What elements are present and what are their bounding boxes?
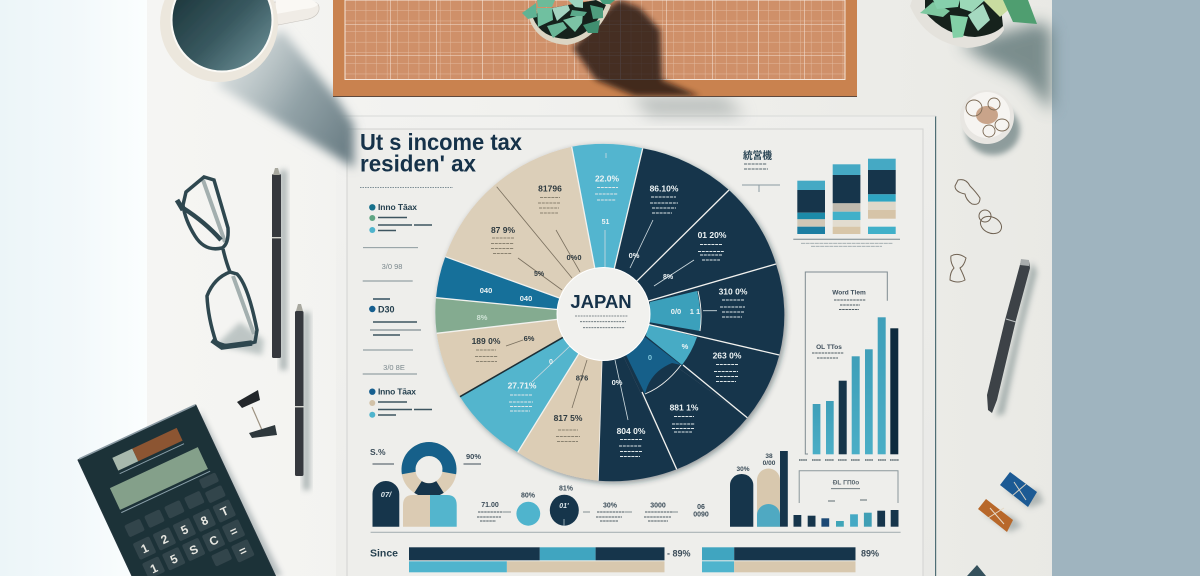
icon: coffee mug [160, 0, 319, 82]
wedge separators [436, 147, 779, 481]
legend note one [363, 248, 418, 281]
calculator: = [237, 543, 249, 559]
title: residen' ax [360, 150, 476, 176]
bottom text and circle stats: 80% [521, 492, 536, 500]
calculator: 1 [148, 561, 160, 576]
white wedge labels: 804 0% [617, 426, 646, 436]
pie wedges [435, 144, 784, 481]
white wedge labels: 310 0% [719, 286, 748, 296]
calculator: T [218, 503, 231, 519]
title [360, 129, 522, 176]
dark wedge text lines [475, 198, 580, 442]
top right caption [742, 149, 780, 192]
calculator [78, 405, 282, 576]
calculator: 5 [168, 551, 180, 567]
plant shadow on poster [630, 96, 745, 116]
column chart: Word Tlem [832, 290, 866, 296]
icon: pen left two [295, 304, 310, 490]
legend two [369, 299, 421, 335]
white wedge labels: 0/0 [671, 307, 681, 316]
bottom text and circle stats: 30% [603, 502, 618, 510]
white wedge labels: 0 [549, 359, 553, 366]
bottom right bars: 38 [765, 453, 773, 460]
icon: pen left one [272, 168, 287, 370]
white wedge labels: 1 1 [690, 307, 700, 316]
small donut and person chart: S.% [370, 447, 386, 457]
legend note one: 3/0 98 [382, 262, 402, 271]
calculator: 5 [179, 522, 191, 538]
small donut and person chart: 90% [466, 452, 481, 461]
white wedge labels: % [682, 342, 689, 351]
cup shadow [215, 30, 354, 168]
legend one: Inno Tāax [378, 202, 417, 212]
icon: paperclips [950, 180, 1004, 282]
white wedge labels: 0 [648, 353, 652, 362]
dark wedge labels [472, 184, 588, 423]
bottom text and circle stats: 0090 [693, 512, 709, 518]
calculator: C [207, 532, 221, 549]
title divider [360, 186, 453, 188]
white wedge labels: 040 [480, 286, 492, 295]
bottom right bars: 30% [736, 466, 750, 473]
white wedge labels: 040 [520, 294, 532, 303]
calculator: = [228, 524, 240, 539]
dark wedge labels: 189 0% [472, 336, 501, 346]
title: Ut s income tax [360, 129, 522, 155]
icon: plant top right [910, 0, 1037, 48]
icon: glasses [177, 177, 264, 355]
cutting board grid mat [333, 0, 857, 96]
stacked bar chart [793, 159, 900, 246]
column chart: OL TTos [816, 344, 842, 351]
small donut and person chart: 07/ [381, 490, 392, 499]
legend three: Inno Tāax [378, 386, 416, 396]
bottom text and circle stats: 71.00 [481, 502, 499, 509]
white wedge labels: 8% [477, 313, 488, 322]
icon: succulent in pot [522, 0, 615, 45]
inner ring wedges [626, 291, 701, 394]
dark wedge labels: 87 9% [491, 225, 515, 235]
dark wedge labels: 81796 [538, 184, 562, 194]
white wedge labels: 01 20% [698, 230, 727, 240]
white wedge labels: 881 1% [670, 402, 699, 412]
dark wedge labels: 817 5% [554, 413, 583, 423]
icon: clip dish [960, 90, 1020, 155]
icon: binder clips right [967, 472, 1044, 576]
dark wedge labels: 876 [576, 374, 588, 382]
white wedge text lines [509, 188, 745, 456]
legend three [369, 386, 432, 418]
white wedge labels: 0% [629, 251, 640, 260]
legend note two: 3/0 8E [383, 363, 405, 372]
icon: pen right [987, 259, 1037, 416]
white wedge labels: 27.71% [508, 380, 537, 390]
calculator: 8 [199, 513, 211, 528]
bottom stacked bars [370, 547, 879, 572]
centre circle: JAPAN [570, 291, 632, 312]
bottom right bars [730, 451, 898, 527]
column chart [799, 272, 899, 460]
poster sheet [336, 116, 936, 576]
icon: binder clip left [237, 390, 277, 438]
top right caption: 統営機 [743, 149, 772, 162]
bottom text and circle stats: 81% [559, 486, 574, 492]
bottom right bars: ÐL ΓΠ0o [833, 480, 859, 486]
dark wedge labels: 0%0 [566, 253, 582, 262]
plant shadow top right [960, 22, 1052, 112]
calculator: S [187, 542, 200, 558]
dark wedge labels: 5% [534, 271, 545, 278]
bottom right bars: 0/00 [763, 460, 776, 467]
white wedge labels: 0% [612, 378, 623, 387]
bottom text and circle stats [477, 486, 709, 526]
white wedge labels: 22.0% [595, 174, 619, 184]
baseline [371, 531, 901, 533]
white wedge labels: 51 [602, 219, 609, 226]
bottom stacked bars: - 89% [667, 548, 691, 558]
bottom text and circle stats: 3000 [650, 502, 666, 510]
small donut and person chart [370, 447, 481, 527]
bottom stacked bars: Since [370, 548, 398, 560]
calculator: 2 [159, 531, 171, 547]
centre circle [557, 268, 650, 360]
legend note two [363, 350, 417, 374]
legend one [369, 202, 432, 233]
legend two: D30 [378, 304, 395, 314]
pie chart [435, 144, 784, 481]
bottom stacked bars: 89% [861, 548, 879, 558]
dark wedge labels: 6% [524, 334, 535, 343]
white wedge labels: 8% [663, 274, 674, 281]
white wedge labels: 263 0% [713, 350, 742, 360]
wedge leader lines [497, 153, 717, 420]
white wedge labels [477, 174, 748, 436]
white wedge labels: 86.10% [650, 184, 679, 194]
bottom text and circle stats: 06 [697, 504, 705, 511]
bottom text and circle stats: 01' [559, 503, 569, 510]
calculator: 1 [139, 541, 151, 556]
